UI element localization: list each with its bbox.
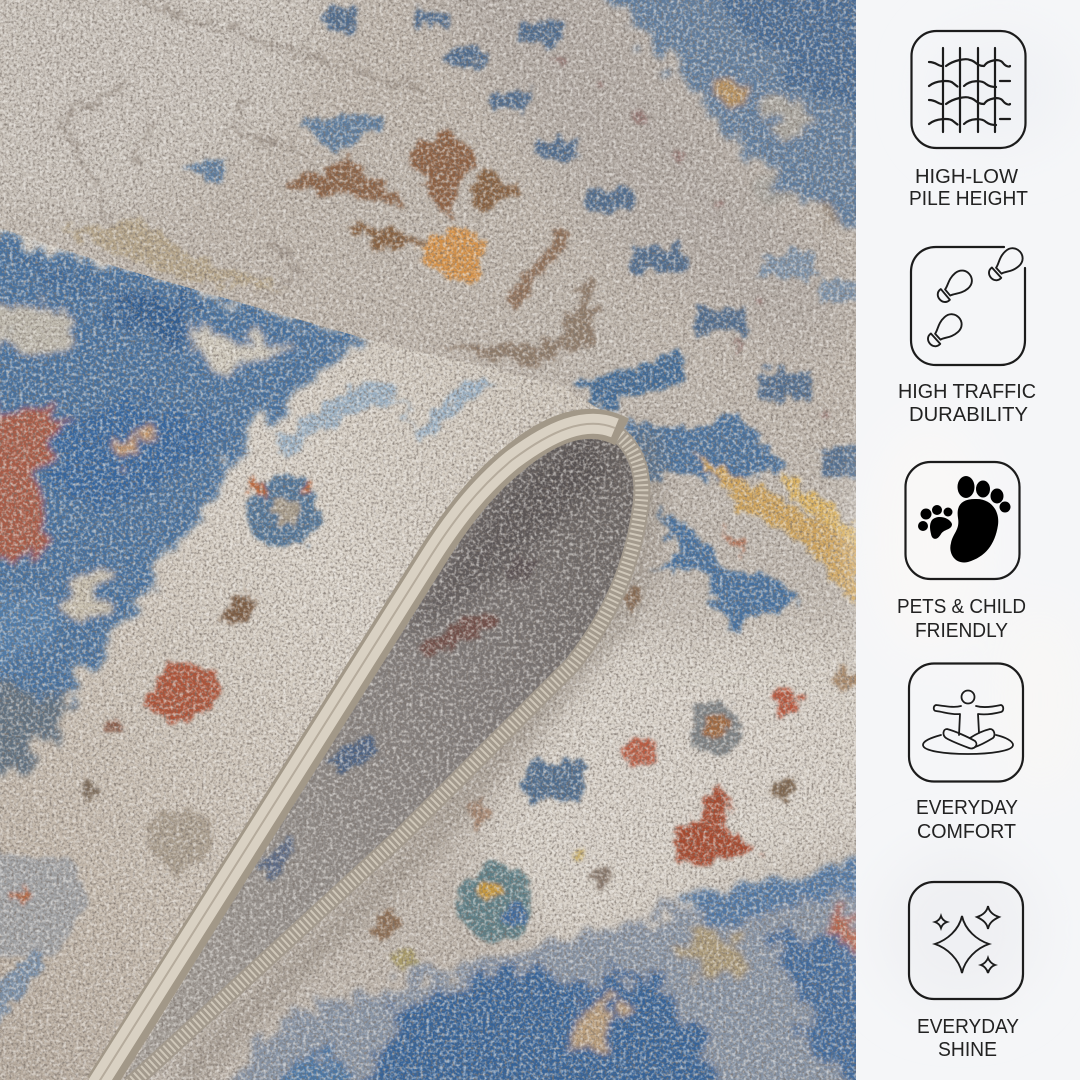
- floor rug blue border bottom: [210, 850, 900, 1080]
- icon: paw and baby foot: [906, 462, 1020, 579]
- label: pets and child friendly: FRIENDLY: [915, 620, 1008, 642]
- floor rug lower dots: [371, 668, 857, 968]
- label: everyday comfort: COMFORT: [917, 821, 1016, 843]
- label: high traffic durability: [898, 381, 1036, 426]
- icon: seated meditation figure: [909, 664, 1023, 782]
- label: everyday shine: SHINE: [938, 1039, 997, 1061]
- label: high traffic durability: DURABILITY: [909, 404, 1028, 426]
- outer hem ribs: [130, 424, 642, 1080]
- floor rug diamond row: [325, 5, 862, 478]
- underside backing: [120, 430, 640, 1080]
- floor rug base: [0, 0, 856, 1080]
- floor rug brown floral motif: [60, 112, 600, 365]
- floor rug blue border top right: [602, 0, 856, 232]
- icon: sparkles: [909, 882, 1023, 999]
- label: high-low pile height: [909, 166, 1028, 210]
- underside shadow: [409, 442, 605, 634]
- panel: feature sidebar: [856, 0, 1080, 1080]
- label: pets and child friendly: [897, 596, 1026, 642]
- border motifs: [0, 375, 495, 1040]
- label: everyday shine: [917, 1016, 1019, 1061]
- rug light texture overlay: [0, 0, 856, 1080]
- label: everyday comfort: EVERYDAY: [916, 797, 1018, 819]
- rolled corner underside: [120, 430, 640, 1080]
- floor rug blue and amber medallion: [575, 350, 860, 630]
- icon: footprints: [911, 244, 1027, 365]
- blue field: [0, 226, 372, 810]
- label: everyday comfort: [916, 797, 1018, 843]
- label: high-low pile height: PILE HEIGHT: [909, 188, 1028, 210]
- label: pets and child friendly: PETS & CHILD: [897, 596, 1026, 618]
- floor rug pale field: [0, 0, 900, 960]
- sidebar background: [856, 0, 1080, 1080]
- underside faded motifs: [259, 556, 534, 878]
- floor rug small red specks: [555, 57, 831, 421]
- label: everyday shine: EVERYDAY: [917, 1016, 1019, 1038]
- label: high traffic durability: HIGH TRAFFIC: [898, 381, 1036, 403]
- outer hem binding: [130, 424, 642, 1080]
- icon: high-low pile height: [912, 31, 1026, 148]
- cream border: [0, 220, 640, 1080]
- front hem stitch: [97, 424, 615, 1080]
- rug dark texture overlay: [0, 0, 856, 1080]
- floor rug faint line motifs: [60, 0, 420, 300]
- sidebar soft marbling: [870, 30, 1080, 1010]
- front hem binding: [100, 424, 622, 1080]
- label: high-low pile height: HIGH-LOW: [915, 166, 1018, 188]
- front hem highlight: [97, 424, 615, 1080]
- shadow under roll: [180, 430, 652, 1080]
- rolled corner front face: [0, 220, 640, 1080]
